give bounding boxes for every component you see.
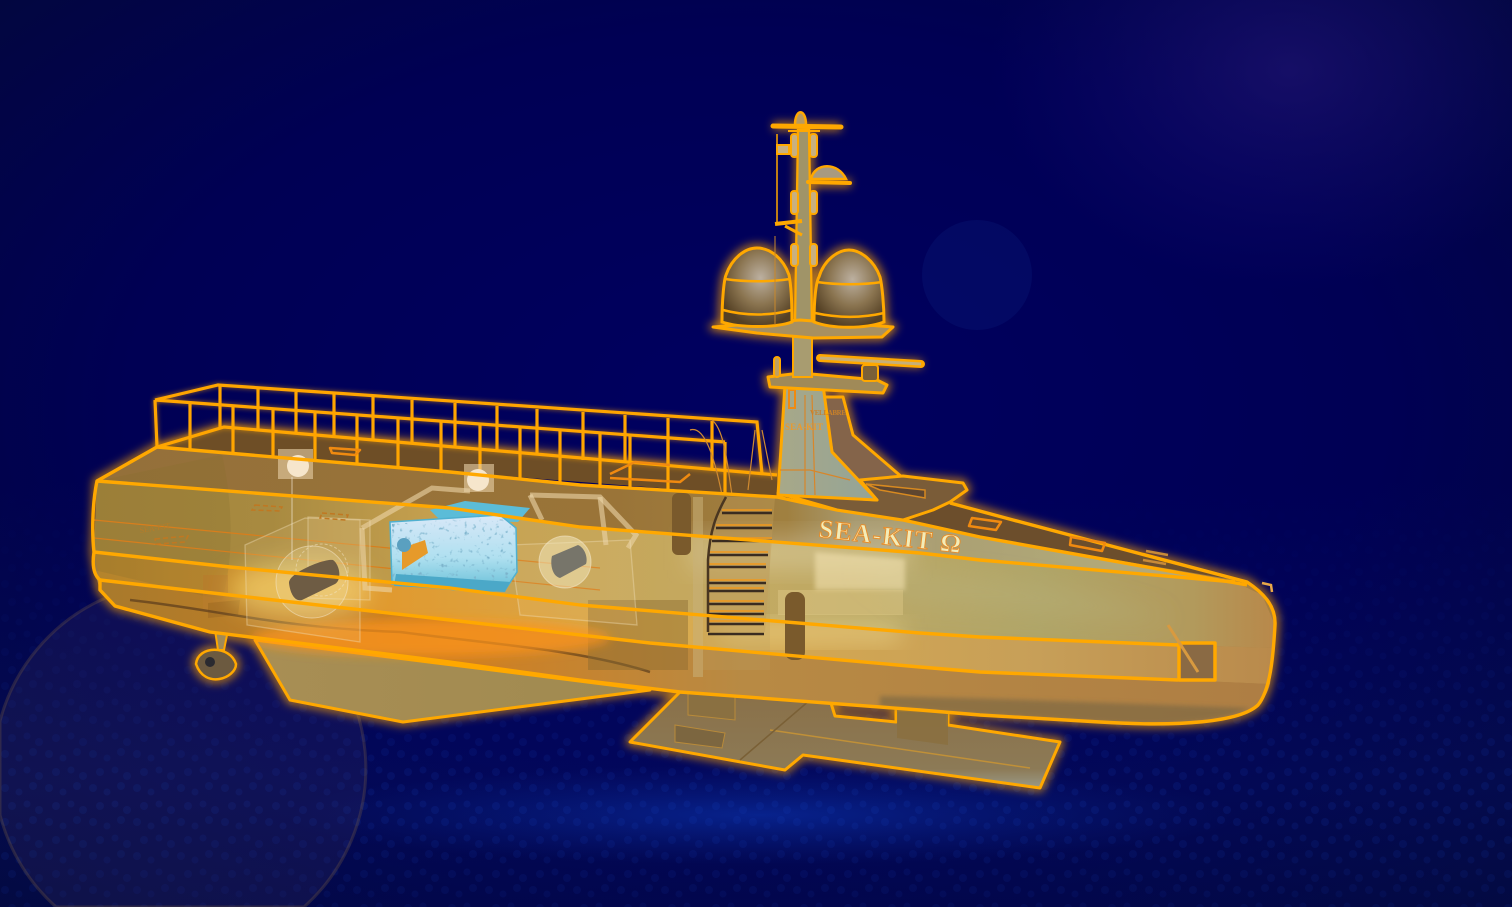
vessel — [93, 112, 1275, 788]
stern bulkhead and details: SEA-KIT — [139, 521, 171, 535]
lens flare circle: bottom left — [0, 583, 366, 907]
bright orange engine room glow — [250, 620, 610, 656]
bilge contour line — [130, 600, 650, 672]
flared platform — [778, 476, 967, 520]
right radome — [814, 250, 884, 327]
deck surface — [157, 427, 777, 497]
railing — [155, 385, 777, 495]
bow highlights — [860, 570, 1170, 620]
dome platform — [713, 320, 893, 338]
hull name text: SEA-KIT Ω — [817, 514, 963, 559]
thin mast stays — [690, 420, 772, 495]
aft fin of superstructure — [823, 397, 903, 500]
left radome — [722, 248, 792, 326]
top crossbar — [773, 112, 841, 131]
propeller — [196, 630, 236, 679]
hull band: middle — [94, 552, 1274, 684]
small dome — [808, 166, 850, 183]
lower keel plate — [630, 668, 1060, 788]
tower label: SEA-KIT — [785, 422, 823, 432]
staircase — [708, 497, 775, 634]
lens flare circle: near mast — [922, 220, 1032, 330]
starboard generator — [539, 536, 591, 588]
port generator — [276, 544, 348, 618]
tracked machinery — [672, 493, 805, 660]
mast antennas — [775, 134, 817, 325]
bow keel shadow — [880, 696, 1250, 724]
radar — [774, 357, 921, 381]
skeg fin — [255, 640, 650, 722]
glow behind vessel — [94, 126, 1275, 788]
tower details — [780, 390, 850, 495]
upper mast — [795, 130, 812, 325]
lower mast — [793, 337, 812, 377]
roof lights — [278, 449, 494, 560]
railing glow — [155, 385, 777, 475]
bow dark deck — [903, 503, 1247, 582]
stern hatches — [155, 505, 348, 544]
tower label upper: VELLABRE — [810, 409, 846, 417]
tower — [778, 385, 877, 500]
cyan engine block — [390, 501, 530, 592]
engine room frame — [362, 488, 636, 590]
hull band: side strip — [97, 447, 1247, 585]
hull lines — [93, 447, 1275, 724]
stern bulkhead and details — [94, 455, 600, 618]
hull base — [94, 447, 1275, 724]
central compartment — [588, 497, 910, 677]
deck hatches — [330, 448, 1168, 564]
engine room boxes — [245, 517, 637, 642]
lower platform — [768, 373, 887, 393]
bright yellow engine room glow — [230, 562, 370, 618]
hull band: upper — [94, 481, 1275, 648]
bow square fitting — [1168, 583, 1272, 680]
hull band: lower — [100, 580, 1270, 724]
